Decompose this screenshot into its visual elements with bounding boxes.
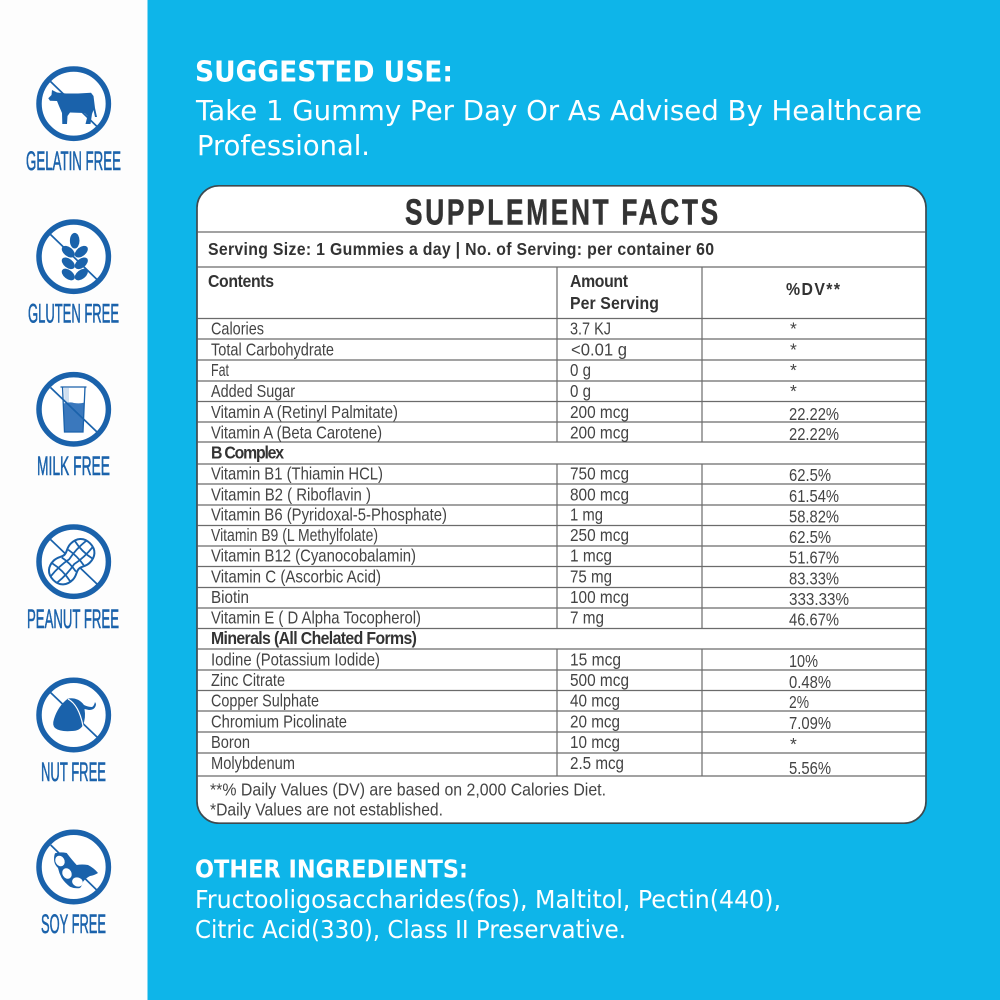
table header: Amount [570, 271, 628, 291]
row: molybdenum: 5.56% [789, 758, 831, 778]
table header: Per Serving [570, 293, 659, 313]
row: vitamin B9: 62.5% [789, 527, 831, 547]
row: calories [211, 318, 797, 338]
row: copper sulphate: 2% [789, 692, 809, 712]
row: vitamin C: 83.33% [789, 568, 839, 588]
badge: milk free [37, 375, 110, 481]
row heading: b complex: B Complex [211, 443, 285, 463]
row: iodine: Iodine (Potassium Iodide) [211, 650, 380, 670]
row: calories: * [790, 318, 797, 338]
row: vitamin B6: 1 mg [570, 504, 603, 524]
sidebar: free-from badges: PEANUT FREE [27, 604, 119, 634]
footnotes: *Daily Values are not established. [210, 800, 443, 820]
row: biotin: 333.33% [789, 589, 849, 609]
badge: gluten free [28, 222, 119, 328]
row: zinc citrate: 500 mcg [570, 670, 629, 690]
row: vitamin B1: 62.5% [789, 465, 831, 485]
row: chromium picolinate: Chromium Picolinate [211, 712, 347, 732]
row: fat: Fat [211, 360, 229, 380]
section: other ingredients: OTHER INGREDIENTS: [195, 854, 468, 884]
row: vitamin B2: Vitamin B2 ( Riboflavin ) [211, 484, 371, 504]
row: vitamin B9: Vitamin B9 (L Methylfolate) [211, 525, 378, 545]
row: fat [211, 360, 797, 380]
row: added sugar [211, 381, 797, 401]
row: zinc citrate: 0.48% [789, 672, 831, 692]
footnotes [210, 780, 606, 820]
row: vitamin B1 [211, 464, 831, 485]
row: vitamin B1: Vitamin B1 (Thiamin HCL) [211, 464, 383, 484]
section: suggested use: SUGGESTED USE: [195, 56, 453, 88]
badge: gelatin free: GELATIN FREE [26, 146, 121, 176]
row: vitamin B2 [211, 484, 839, 506]
row: vitamin A retinyl: 200 mcg [570, 402, 629, 422]
row: iodine: 10% [789, 651, 818, 671]
panel: supplement facts table [197, 186, 926, 823]
row: vitamin E: 46.67% [789, 610, 839, 630]
sidebar: free-from badges: GLUTEN FREE [28, 298, 119, 328]
row: chromium picolinate [211, 712, 831, 733]
row: vitamin B6: Vitamin B6 (Pyridoxal-5-Phosphate) [211, 504, 447, 524]
row: vitamin B12: 51.67% [789, 548, 839, 568]
serving size line: Serving Size: 1 Gummies a day | No. of Serving: per container 60 [208, 239, 714, 259]
row: boron: Boron [211, 732, 250, 752]
section: other ingredients: Fructooligosaccharides(fos), Maltitol, Pectin(440), [195, 885, 781, 914]
row: vitamin B9: 250 mcg [570, 525, 629, 545]
row: fat: 0 g [570, 360, 591, 380]
row: vitamin E: Vitamin E ( D Alpha Tocopherol) [211, 608, 421, 628]
row: vitamin B9 [211, 525, 831, 547]
row: chromium picolinate: 20 mcg [570, 712, 620, 732]
row: vitamin A beta carotene: 200 mcg [570, 422, 629, 442]
row: vitamin B1: 750 mcg [570, 464, 629, 484]
row: vitamin E: 7 mg [570, 608, 604, 628]
row: total carbohydrate: <0.01 g [571, 340, 627, 360]
row: added sugar: Added Sugar [211, 381, 295, 401]
badge: milk free: MILK FREE [37, 451, 110, 481]
row: vitamin B2: 800 mcg [570, 484, 629, 504]
badge: nut free [39, 680, 108, 787]
row: vitamin B12: 1 mcg [570, 546, 612, 566]
row: zinc citrate: Zinc Citrate [211, 670, 285, 690]
section: other ingredients [195, 854, 781, 944]
row: added sugar: * [790, 381, 797, 401]
row: vitamin B6: 58.82% [789, 506, 839, 526]
row: vitamin B6 [211, 504, 839, 526]
table header [208, 271, 840, 313]
badge: peanut free [27, 527, 119, 634]
row: iodine [211, 650, 818, 671]
row: vitamin B2: 61.54% [789, 486, 839, 506]
row: vitamin B12 [211, 546, 839, 568]
row: added sugar: 0 g [570, 381, 591, 401]
badge: soy free [39, 832, 108, 939]
badge: nut free: NUT FREE [41, 757, 106, 787]
table header: %DV** [786, 279, 840, 299]
row: boron [211, 732, 797, 754]
row: vitamin C: 75 mg [570, 566, 612, 586]
row: biotin: Biotin [211, 587, 249, 607]
row: zinc citrate [211, 670, 831, 692]
row: vitamin A retinyl [211, 402, 839, 424]
row: boron: 10 mcg [570, 732, 620, 752]
row: vitamin C [211, 566, 839, 588]
row: molybdenum: Molybdenum [211, 753, 295, 773]
row: vitamin A beta carotene: 22.22% [789, 424, 839, 444]
sidebar: free-from badges [0, 0, 148, 1000]
row: vitamin A beta carotene: Vitamin A (Beta Carotene) [211, 422, 382, 442]
row: boron: * [790, 734, 797, 754]
row: calories: 3.7 KJ [570, 318, 611, 338]
footnotes: **% Daily Values (DV) are based on 2,000 Calories Diet. [210, 780, 606, 800]
row: chromium picolinate: 7.09% [789, 713, 831, 733]
row heading: minerals: Minerals (All Chelated Forms) [211, 628, 417, 648]
row: copper sulphate: 40 mcg [570, 690, 620, 710]
row: biotin [211, 587, 849, 609]
badge: soy free: SOY FREE [41, 909, 106, 939]
row: biotin: 100 mcg [570, 587, 629, 607]
row: vitamin A retinyl: 22.22% [789, 404, 839, 424]
table title: SUPPLEMENT FACTS [405, 191, 718, 233]
row: vitamin C: Vitamin C (Ascorbic Acid) [211, 566, 381, 586]
section: suggested use: Take 1 Gummy Per Day Or As Advised By Healthcare [195, 95, 922, 127]
row: vitamin E [211, 608, 839, 630]
row: total carbohydrate [211, 340, 797, 360]
row: iodine: 15 mcg [570, 650, 621, 670]
row: fat: * [790, 360, 797, 380]
row: vitamin B12: Vitamin B12 (Cyanocobalamin) [211, 546, 416, 566]
section: suggested use: Professional. [197, 130, 370, 162]
row: molybdenum: 2.5 mcg [570, 753, 624, 773]
section: other ingredients: Citric Acid(330), Class II Preservative. [195, 915, 626, 944]
badge: gelatin free [26, 69, 121, 176]
row: molybdenum [211, 753, 831, 778]
row: vitamin A beta carotene [211, 422, 839, 444]
section: suggested use [195, 56, 922, 162]
row: calories: Calories [211, 318, 264, 338]
row: total carbohydrate: * [790, 340, 797, 360]
row: copper sulphate: Copper Sulphate [211, 690, 319, 710]
row: total carbohydrate: Total Carbohydrate [211, 340, 334, 360]
row: copper sulphate [211, 690, 809, 712]
row: vitamin A retinyl: Vitamin A (Retinyl Palmitate) [211, 402, 398, 422]
table header: Contents [208, 271, 274, 291]
